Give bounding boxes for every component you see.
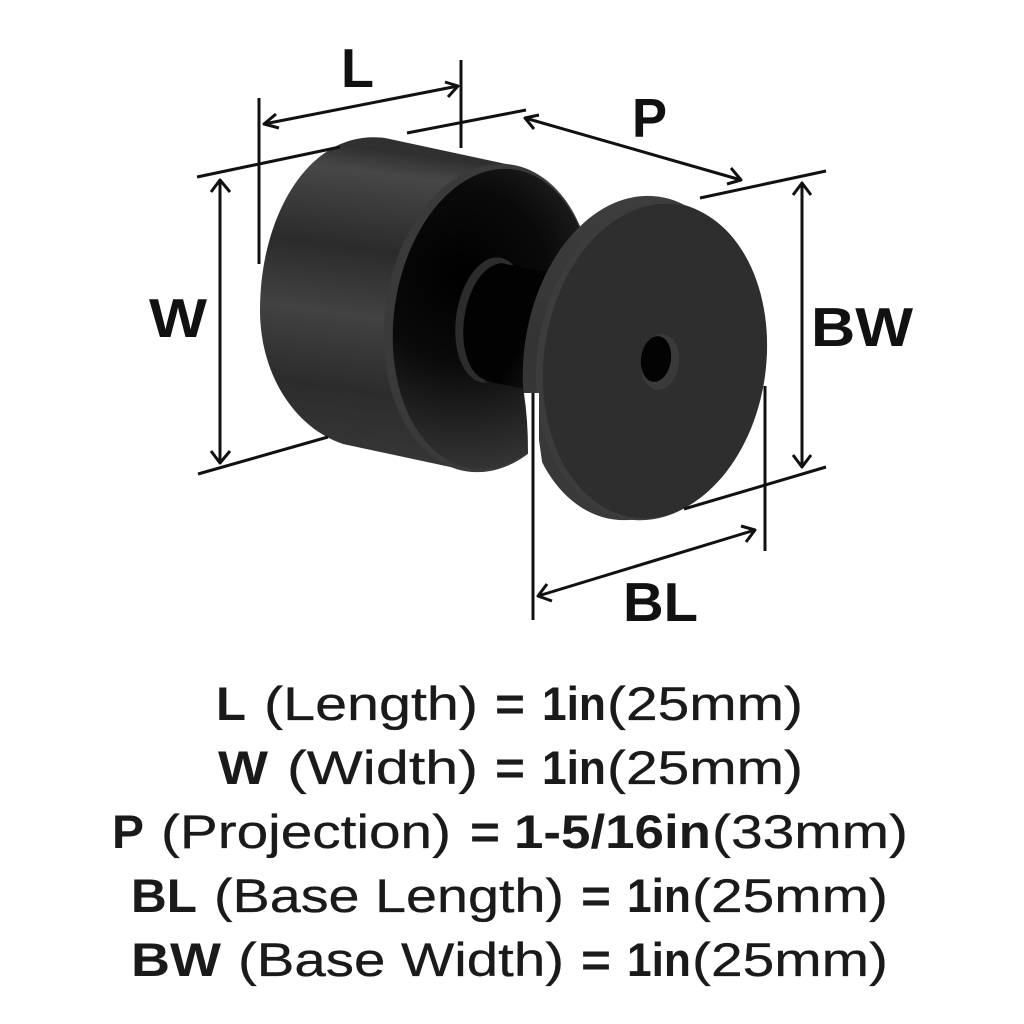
label BL: BL xyxy=(623,571,698,633)
spec: length: (Length) xyxy=(264,677,478,730)
knob neck xyxy=(448,253,560,392)
base front face xyxy=(523,189,787,533)
spec: projection xyxy=(112,805,908,858)
spec: base width: (25mm) xyxy=(692,933,888,986)
spec: width xyxy=(218,741,803,794)
spec: base length: (25mm) xyxy=(692,869,888,922)
spec: projection: (33mm) xyxy=(712,805,908,858)
spec: base width: BW xyxy=(131,933,222,986)
spec: base length: BL xyxy=(131,869,197,922)
spec: base length: (Base Length) xyxy=(214,869,564,922)
spec: base width: = xyxy=(581,933,611,986)
base rim xyxy=(502,181,770,535)
spec: base width: (Base Width) xyxy=(238,933,564,986)
spec: projection: P xyxy=(112,805,144,858)
spec: width: W xyxy=(218,741,269,794)
spec: length xyxy=(216,677,803,730)
label W: W xyxy=(149,287,207,349)
knob body cylinder side xyxy=(260,137,511,471)
spec: width: = xyxy=(495,741,525,794)
label BW: BW xyxy=(811,296,913,358)
specification list xyxy=(112,677,908,986)
knob body front face xyxy=(364,150,614,486)
dimension BL xyxy=(533,386,765,633)
white halo behind base length line xyxy=(524,393,546,490)
spec: width: 1in xyxy=(542,741,606,794)
spec: base width: 1in xyxy=(627,933,691,986)
spec: length: 1in xyxy=(542,677,606,730)
dimension P xyxy=(525,87,826,198)
product: cabinet knob xyxy=(260,137,787,535)
spec: projection: = xyxy=(470,805,500,858)
base chamfer xyxy=(516,187,786,535)
label L: L xyxy=(341,37,374,99)
spec: base length: 1in xyxy=(627,869,691,922)
spec: base width xyxy=(131,933,888,986)
dimension W xyxy=(149,180,328,474)
spec: projection: (Projection) xyxy=(161,805,451,858)
spec: length: L xyxy=(216,677,246,730)
dimension BW xyxy=(684,183,913,509)
spec: length: (25mm) xyxy=(607,677,803,730)
dimension L xyxy=(197,37,526,264)
spec: length: = xyxy=(495,677,525,730)
spec: base length xyxy=(131,869,888,922)
label P: P xyxy=(632,87,667,149)
spec: width: (25mm) xyxy=(607,741,803,794)
spec: base length: = xyxy=(581,869,611,922)
spec: width: (Width) xyxy=(287,741,478,794)
spec: projection: 1-5/16in xyxy=(514,805,711,858)
mounting hole xyxy=(637,332,683,392)
